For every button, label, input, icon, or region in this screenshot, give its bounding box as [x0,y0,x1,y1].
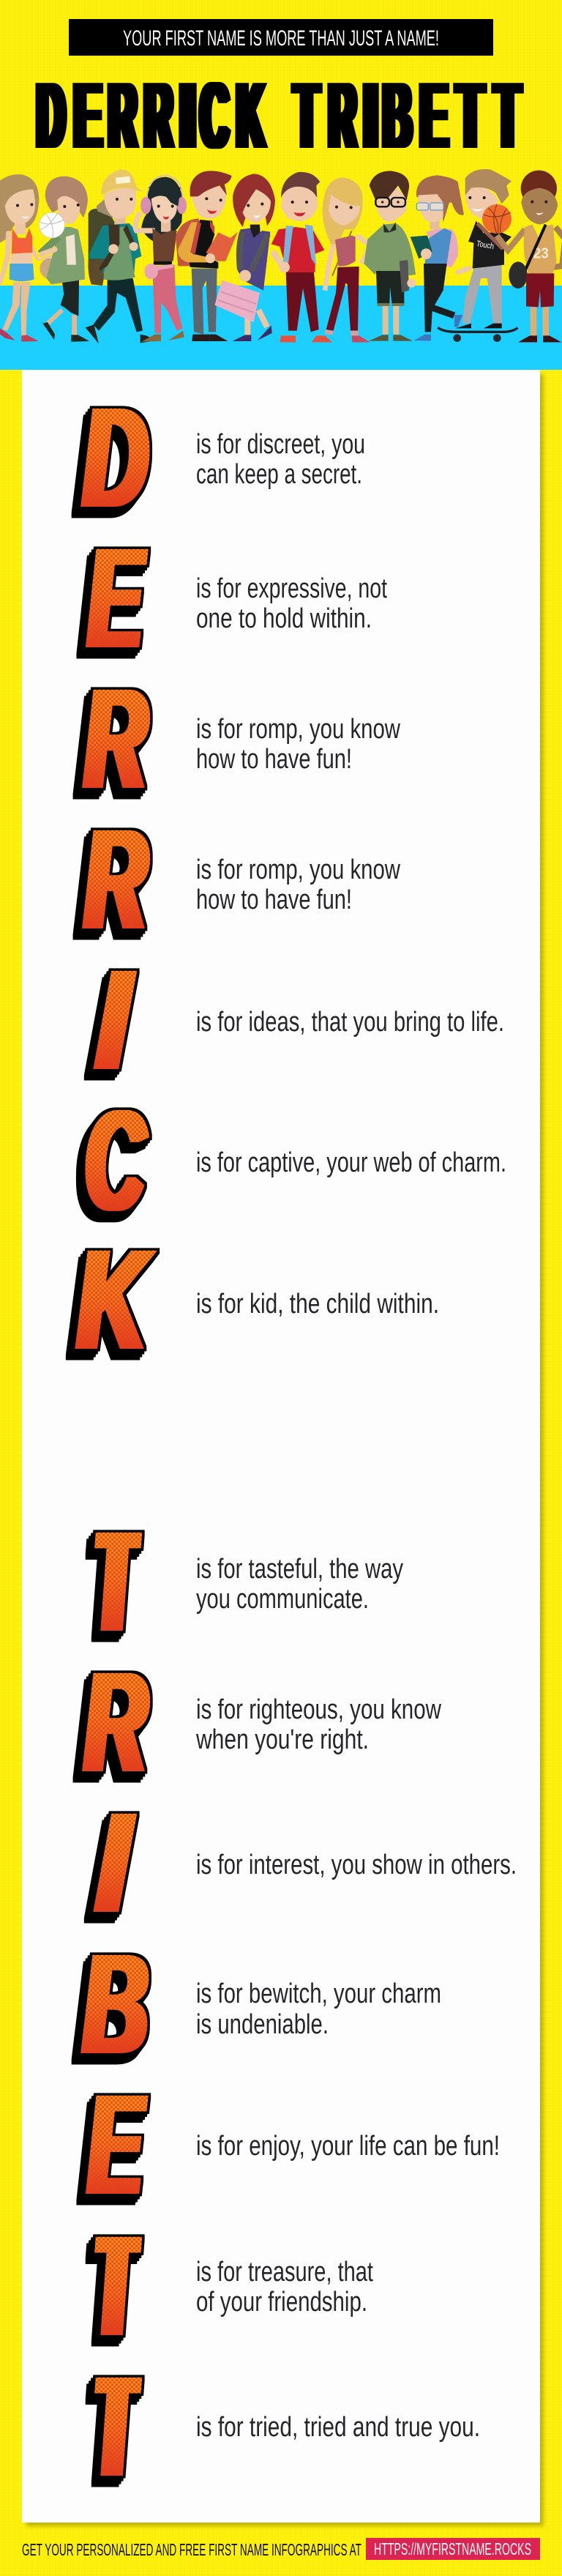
text: treasure: is for treasure, that [196,2257,373,2287]
text: bewitch: is for bewitch, your charm [196,1978,441,2009]
title: name: C [201,63,228,168]
letter E: E [89,2065,144,2225]
row: C [86,1081,506,1240]
row: T [98,1502,403,1661]
row: R [85,659,400,819]
title: name: T [457,63,484,168]
row: R [85,1642,441,1802]
row: D [83,378,365,537]
text: discreet [196,429,365,490]
title: name: E [420,63,448,168]
blue floor band [0,286,562,370]
tagline banner [69,19,493,56]
row: T: T [98,2206,135,2366]
student 2: girl with volleyball [40,176,89,342]
student 12: boy in tank top with shoulder bag: 23 [533,245,549,262]
letter D: D [83,378,148,537]
text: treasure: of your friendship. [196,2287,367,2318]
text: bewitch: is undeniable. [196,2009,329,2040]
text: discreet: can keep a secret. [196,459,362,490]
row: K [78,1220,439,1380]
letter R: R [85,800,146,959]
letter B: B [83,1924,148,2084]
letter R: R [85,1642,146,1802]
letter I: I [94,1783,135,1943]
text: romp [196,855,400,915]
row: I [94,1783,517,1943]
text: tasteful: you communicate. [196,1584,369,1615]
title: name: R [329,63,356,168]
student 11: skater boy with basketball [455,169,525,328]
student 7: boy in red tee [271,172,332,342]
letter R: R [85,659,146,819]
student 9: boy in green sweater with glasses [364,171,416,341]
letter E: E [89,518,144,678]
text: tasteful: is for tasteful, the way [196,1554,403,1585]
student 4: girl with headphones [135,175,187,342]
student 1: girl in orange top [0,174,59,342]
text: bewitch [196,1978,441,2040]
student 3: boy with cap and backpack [86,170,156,343]
text: expressive: one to hold within. [196,603,372,634]
text: romp: how to have fun! [196,744,352,775]
title: name: R [108,63,137,168]
title: name: D [37,63,65,168]
title: name: I [179,63,198,168]
text: expressive [196,573,387,634]
text: righteous: is for righteous, you know [196,1694,441,1725]
text: treasure [196,2257,373,2318]
student 11: skater boy with basketball: Touch [476,239,495,251]
letter I: I [94,940,135,1100]
row: E [89,2065,500,2225]
title: name: B [383,63,412,168]
row: T: T [98,1502,135,1661]
text: tasteful [196,1554,403,1615]
letter K: K [78,1220,153,1380]
letter C: C [86,1081,146,1240]
row: T [98,2347,480,2506]
text: romp: how to have fun! [196,885,352,915]
text: expressive: is for expressive, not [196,573,387,604]
text: righteous [195,1694,441,1755]
text: romp: is for romp, you know [196,855,400,885]
row: T: T [98,2347,135,2506]
student 12: boy in tank top with shoulder bag [509,171,562,342]
title: name: E [74,63,102,168]
illustration: group of students, right half [271,169,562,342]
row: R [85,800,400,959]
text: kid: is for kid, the child within. [196,1289,439,1319]
student 5: boy with book [176,171,238,341]
student 8: blonde girl [323,177,370,342]
white letters panel [22,370,540,2523]
title: name: K [236,63,265,168]
title: name: R [144,63,173,168]
row: E [89,518,387,678]
illustration: group of students, left half [0,170,275,343]
text: righteous: when you're right. [195,1724,369,1755]
row: I [94,940,504,1100]
row: T [98,2206,373,2366]
title: name: T [294,63,319,168]
text: discreet: is for discreet, you [196,429,365,460]
skateboard [438,327,517,342]
student 10: girl with ponytail and tablet [411,175,464,341]
text: tried: is for tried, tried and true you. [196,2412,480,2443]
infographic page: T [495,63,520,168]
row: B [83,1924,441,2084]
student 6: girl with pink bag [214,174,275,341]
text: romp: is for romp, you know [196,714,400,745]
title: name: I [363,63,379,168]
text: romp [196,714,400,775]
panel shadow [26,374,544,2526]
